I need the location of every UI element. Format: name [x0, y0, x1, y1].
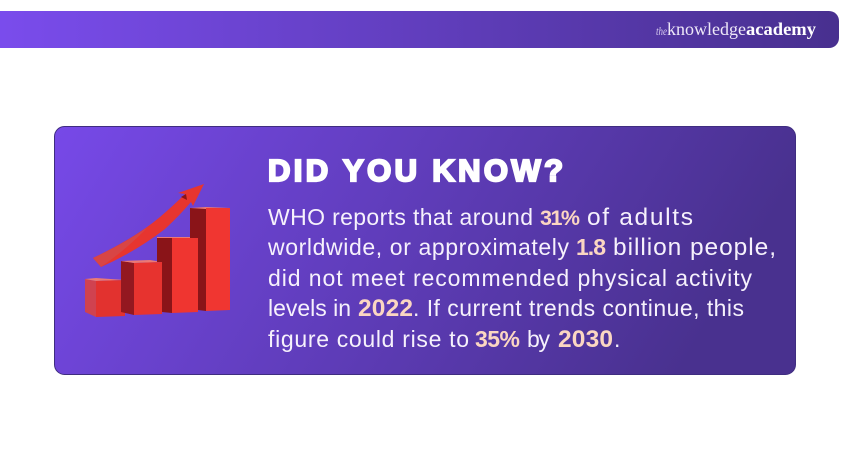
brand logo — [656, 19, 816, 39]
line 4 — [268, 295, 744, 322]
line 1: WHO reports that around — [268, 204, 533, 230]
line 5: 35% — [475, 326, 520, 352]
bar 1 — [85, 278, 125, 317]
line 4: levels in — [268, 295, 351, 321]
brand logo: knowledge — [667, 19, 746, 39]
icon: rising bar chart with arrow — [85, 184, 230, 317]
header bar — [0, 11, 839, 48]
body text — [267, 204, 776, 353]
panel: did you know card — [54, 126, 796, 374]
line 2: worldwide, or approximately — [267, 234, 570, 260]
brand logo: academy — [746, 19, 816, 39]
line 2 — [267, 234, 776, 261]
line 5: figure could rise to — [268, 326, 469, 352]
line 1: of adults — [587, 204, 693, 231]
brand logo: the — [656, 24, 667, 38]
line 2: billion people, — [613, 234, 776, 261]
line 1 — [268, 204, 693, 231]
line 5: . — [614, 326, 620, 352]
line 4: 2022 — [358, 295, 413, 322]
line 2: 1.8 — [576, 234, 606, 260]
heading: DID YOU KNOW? — [268, 153, 563, 188]
line 4: . If current trends continue, this — [413, 295, 744, 321]
arrow — [93, 184, 204, 267]
line 1: 31% — [540, 206, 580, 230]
line 5: by — [527, 326, 550, 352]
bar 3 — [157, 237, 198, 313]
line 5 — [268, 326, 620, 353]
line 3: did not meet recommended physical activity — [268, 265, 752, 291]
line 5: 2030 — [558, 326, 613, 353]
bar 2 — [121, 260, 162, 315]
bar 4 — [190, 207, 230, 311]
